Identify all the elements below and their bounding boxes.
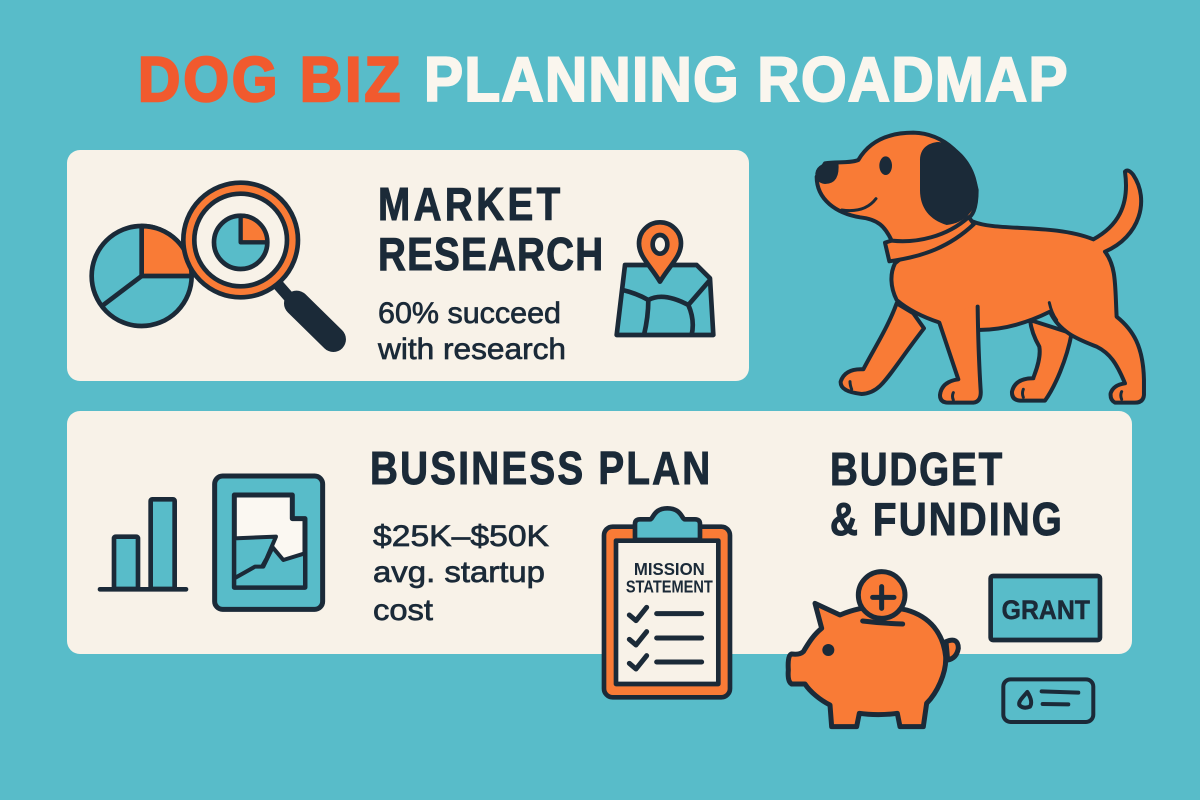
panel: business plan and budget xyxy=(67,411,1132,654)
heading: market research xyxy=(378,179,603,280)
icon: map with pin xyxy=(617,222,713,335)
icon: framed chart document xyxy=(215,476,323,609)
title xyxy=(138,44,1068,114)
icon: magnifying glass xyxy=(183,183,333,339)
text: research statistic: 60% succeed xyxy=(378,297,561,330)
icon: mission statement clipboard: MISSION xyxy=(634,559,705,579)
text: startup cost: cost xyxy=(373,594,434,627)
icon: pie chart xyxy=(92,226,192,326)
heading: budget and funding xyxy=(830,444,1062,545)
ear xyxy=(920,142,978,225)
heading: budget and funding: & FUNDING xyxy=(830,494,1062,545)
text: research statistic: with research xyxy=(377,333,566,366)
illustration: dog xyxy=(815,133,1144,403)
icon: grant certificate xyxy=(991,576,1100,640)
title: PLANNING ROADMAP xyxy=(424,44,1068,114)
icon: grant certificate: GRANT xyxy=(1002,595,1090,625)
far front leg xyxy=(841,303,924,394)
title: DOG BIZ xyxy=(138,44,400,114)
heading: budget and funding: BUDGET xyxy=(830,444,1002,495)
text: startup cost: $25K–$50K xyxy=(373,520,549,553)
smile xyxy=(842,199,876,211)
icon: bar chart xyxy=(100,499,186,589)
body and tail xyxy=(891,171,1144,403)
eye xyxy=(879,156,892,175)
nose xyxy=(815,162,839,184)
far rear leg xyxy=(1012,320,1072,401)
heading: market research: MARKET xyxy=(378,179,560,230)
panel: market research xyxy=(67,150,749,381)
collar xyxy=(885,217,974,261)
icon: cheque xyxy=(1003,679,1093,722)
heading: business plan: BUSINESS PLAN xyxy=(370,443,710,494)
icon: piggy bank with coin xyxy=(788,572,958,727)
text: startup cost xyxy=(373,520,549,627)
text: research statistic xyxy=(377,297,566,366)
heading: market research: RESEARCH xyxy=(378,229,603,280)
icon: mission statement clipboard: STATEMENT xyxy=(626,577,713,597)
near front leg xyxy=(939,303,981,403)
head xyxy=(817,133,977,241)
text: startup cost: avg. startup xyxy=(373,556,545,589)
icon: mission statement clipboard xyxy=(604,508,730,697)
